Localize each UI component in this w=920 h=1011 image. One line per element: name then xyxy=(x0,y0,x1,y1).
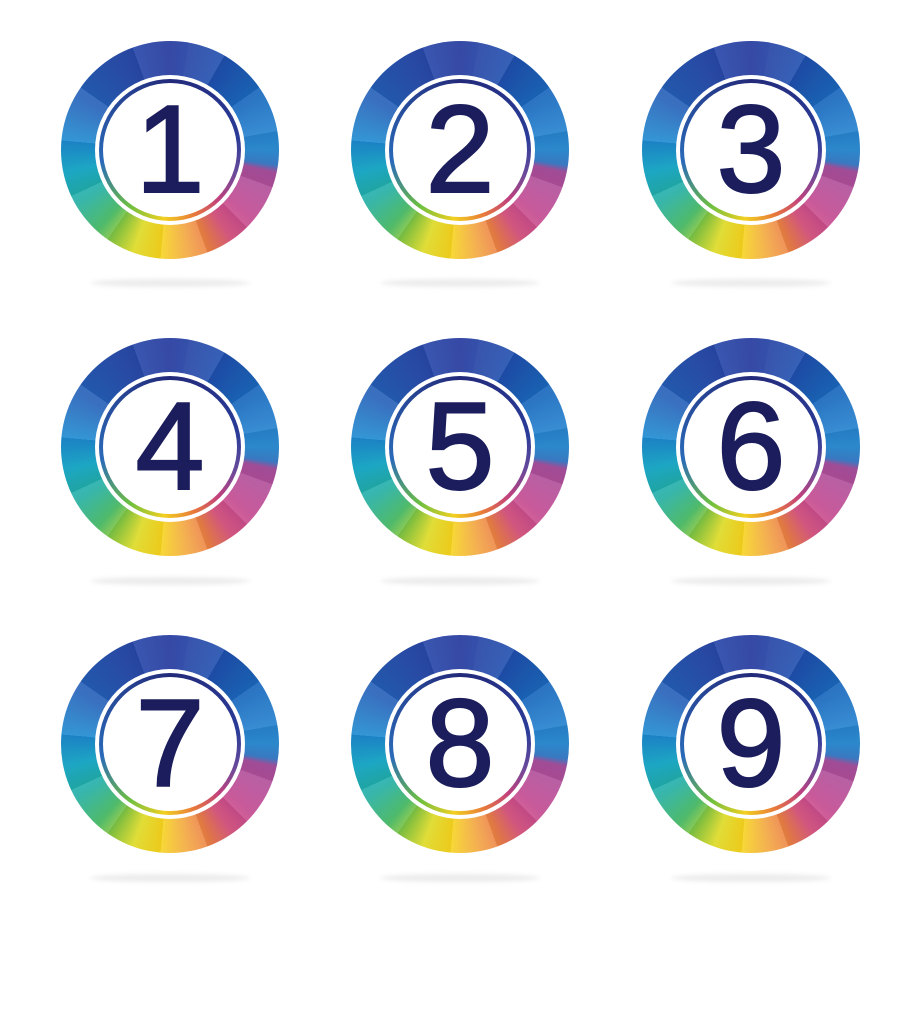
badge 5 xyxy=(351,338,569,556)
badge 7 xyxy=(61,635,279,853)
badge 6: 6 xyxy=(717,378,785,516)
badge 1: 1 xyxy=(136,81,204,219)
badge 1 xyxy=(61,41,279,259)
badge 7: 7 xyxy=(136,675,204,813)
shadow 6 xyxy=(671,577,831,585)
shadow 8 xyxy=(380,874,540,882)
badge 2 xyxy=(351,41,569,259)
shadow 2 xyxy=(380,279,540,287)
badge 6 xyxy=(642,338,860,556)
badge 9 xyxy=(642,635,860,853)
badge 4 xyxy=(61,338,279,556)
shadow 4 xyxy=(90,577,250,585)
shadow 7 xyxy=(90,874,250,882)
shadow 5 xyxy=(380,577,540,585)
badge 8 xyxy=(351,635,569,853)
badge 2: 2 xyxy=(426,81,494,219)
shadow 1 xyxy=(90,279,250,287)
badge 4: 4 xyxy=(136,378,204,516)
shadow 3 xyxy=(671,279,831,287)
badge 3: 3 xyxy=(717,81,785,219)
badge 9: 9 xyxy=(717,675,785,813)
badge 5: 5 xyxy=(426,378,494,516)
badge 3 xyxy=(642,41,860,259)
badge 8: 8 xyxy=(426,675,494,813)
shadow 9 xyxy=(671,874,831,882)
